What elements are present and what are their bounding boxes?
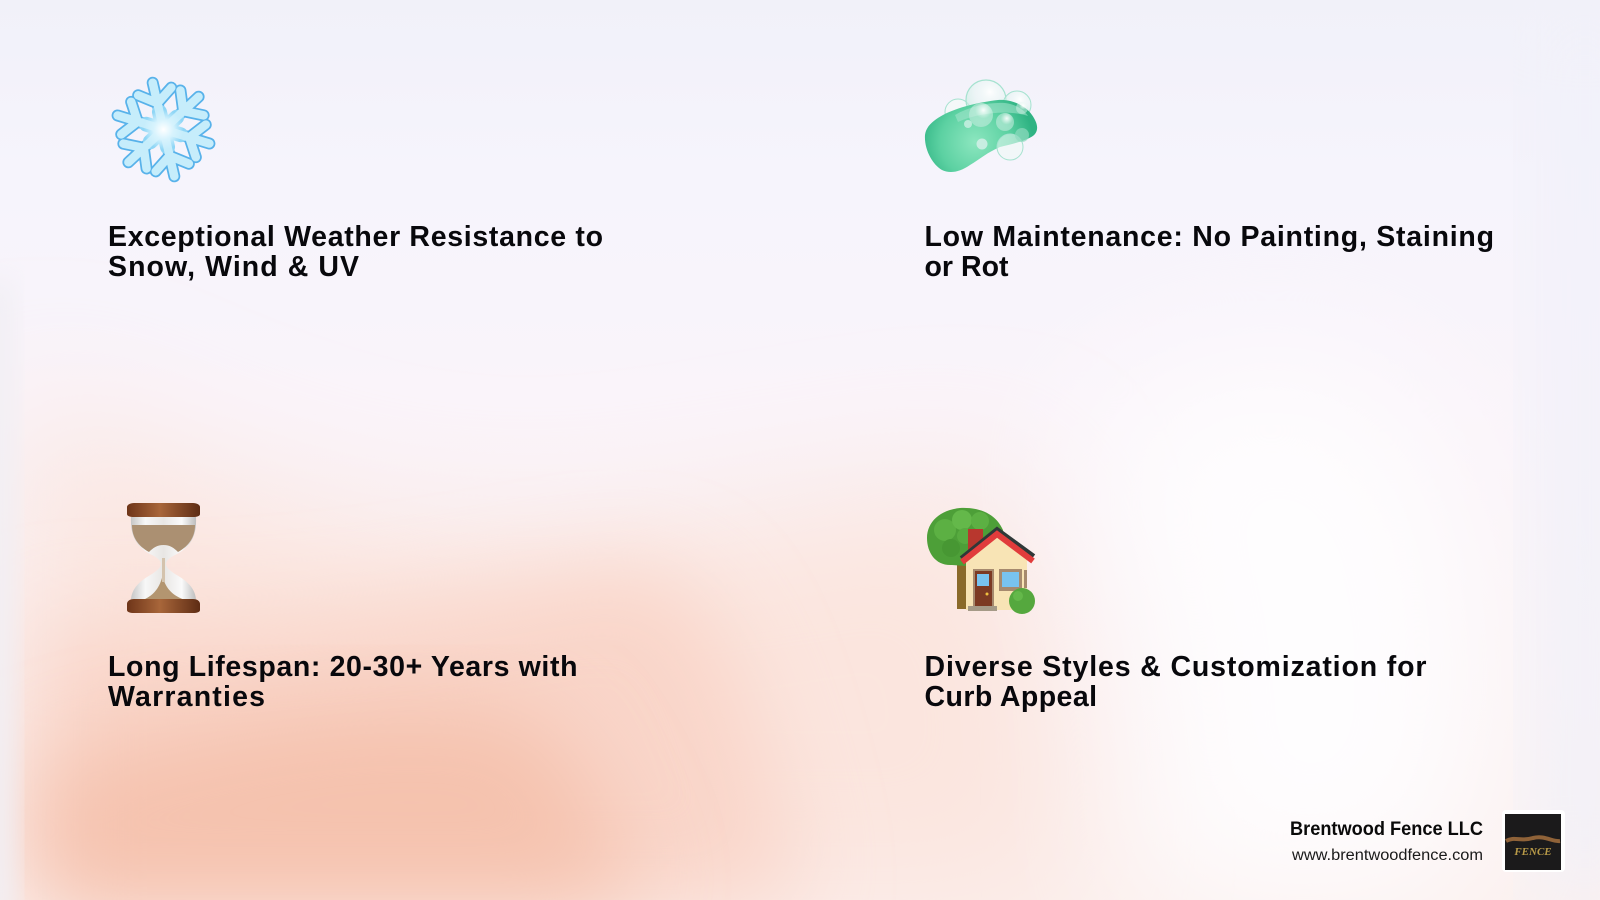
icon: house with tree xyxy=(927,508,1035,614)
brand url: www.brentwoodfence.com xyxy=(1291,847,1483,864)
heading: low maintenance xyxy=(924,221,1494,283)
brand name: Brentwood Fence LLC xyxy=(1290,819,1483,840)
panel: long lifespan xyxy=(108,503,578,713)
panel: low maintenance xyxy=(924,80,1494,283)
heading: long lifespan: Warranties xyxy=(108,681,265,713)
icon: snowflake xyxy=(104,71,223,188)
heading: weather resistance xyxy=(108,221,603,283)
footer: brand xyxy=(1290,810,1565,872)
logo: FENCE xyxy=(1513,846,1552,858)
icon: hourglass xyxy=(127,503,200,613)
icon: soap with bubbles xyxy=(925,80,1037,172)
heading: long lifespan xyxy=(108,651,578,713)
panel: diverse styles xyxy=(924,508,1426,713)
panel: weather resistance xyxy=(104,71,603,283)
heading: low maintenance: Low Maintenance: No Painting, Staining xyxy=(924,221,1494,253)
logo xyxy=(1502,810,1565,872)
heading: weather resistance: Snow, Wind & UV xyxy=(108,251,359,283)
heading: diverse styles xyxy=(924,651,1426,713)
heading: diverse styles: Curb Appeal xyxy=(924,681,1097,713)
heading: weather resistance: Exceptional Weather Resistance to xyxy=(108,221,603,253)
heading: long lifespan: Long Lifespan: 20-30+ Years with xyxy=(108,651,578,683)
heading: diverse styles: Diverse Styles & Customization for xyxy=(924,651,1426,683)
heading: low maintenance: or Rot xyxy=(924,251,1009,283)
